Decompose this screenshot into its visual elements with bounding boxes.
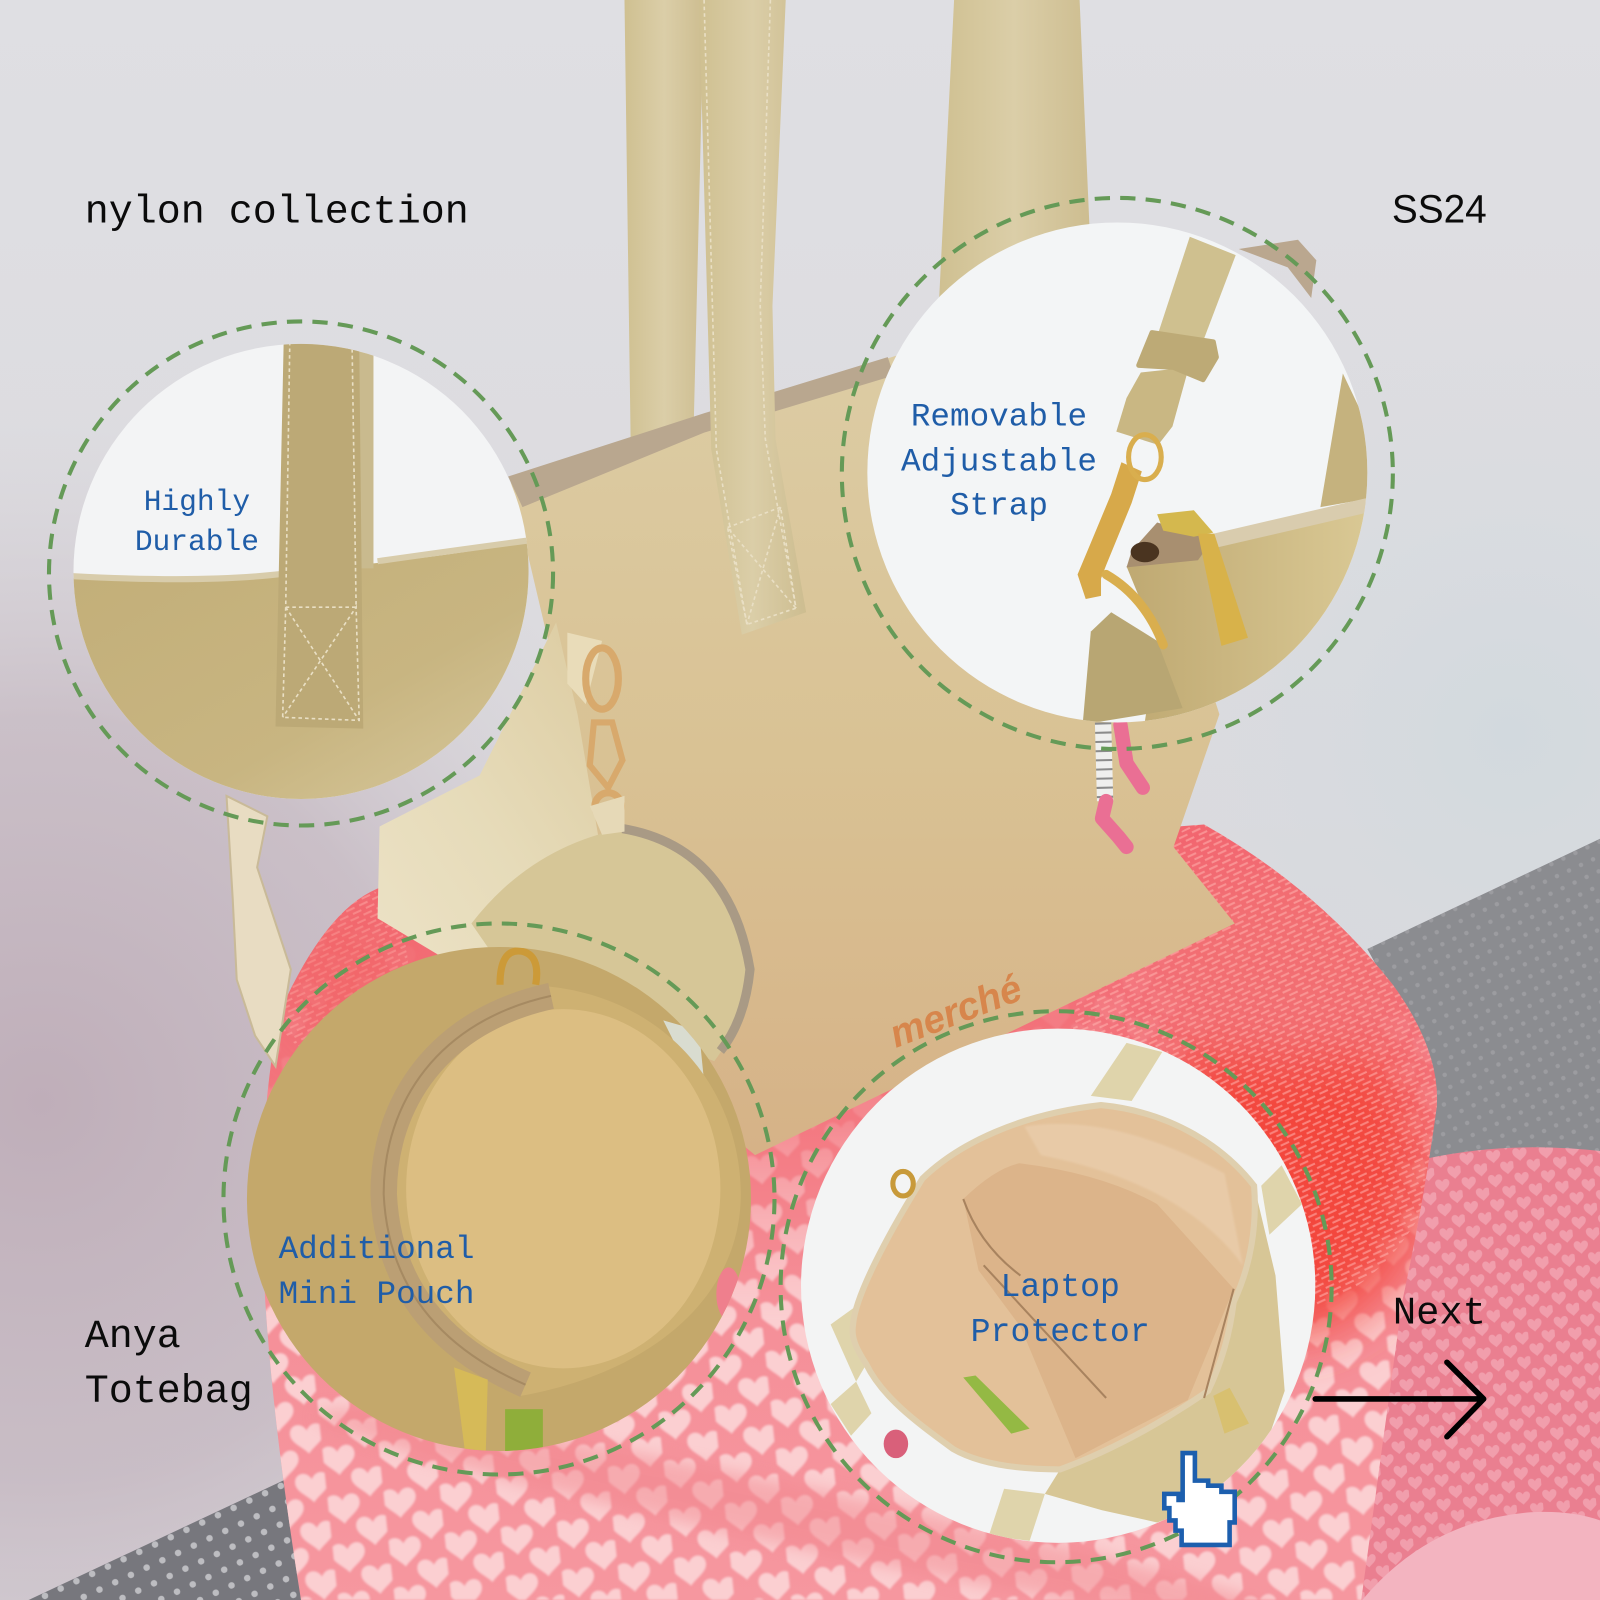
dashed ring [842,198,1393,749]
adjustable strap [1159,236,1236,338]
grey mesh floor: right [1367,839,1600,1194]
zoom circle: mini pouch [223,923,774,1474]
bag body [510,355,1235,1155]
heading: nylon collection: nylon collection [85,190,469,235]
label: highly durable: Durable [135,525,259,559]
label: additional mini pouch: Additional [279,1231,474,1268]
tan pouch [1127,500,1372,735]
tan tab [1083,612,1183,724]
next label: Next [1393,1291,1486,1335]
dashed ring [781,1011,1332,1562]
back left handle [624,0,704,439]
dashed ring [223,923,774,1474]
zipper band [508,357,894,507]
bubble wrap sheet: right [1327,1147,1600,1600]
pouch zipper [384,996,551,1385]
label: laptop protector: Laptop [1001,1268,1120,1306]
left gusset [378,622,612,980]
pink pull peeking [884,1430,908,1458]
green tag [505,1409,543,1455]
icon: pixel hand cursor [1164,1453,1235,1545]
product name: Totebag [85,1370,253,1415]
lining [853,1105,1255,1469]
label: highly durable: Highly [144,485,250,519]
strap tail [227,796,291,1066]
laptop pocket [963,1163,1234,1458]
label: laptop protector: Protector [971,1313,1150,1351]
tote bag: main photo [227,0,1316,1155]
label: removable adjustable strap: Removable [911,399,1087,436]
green label [963,1376,1030,1434]
front handle [699,0,806,635]
gold hardware [893,1171,913,1196]
zipper end and tag [1126,522,1202,568]
dashed ring [49,321,553,826]
heading: season: SS24 [1392,187,1487,231]
zoom circle: highly durable [49,321,553,826]
product name: Anya [85,1315,181,1360]
zoom circle: laptop protector [781,1011,1332,1562]
gold clasp [1078,462,1142,599]
right strap [1320,373,1372,507]
label: removable adjustable strap: Adjustable [901,443,1097,480]
bubble wrap cylinder [264,824,1438,1600]
pouch face [406,1009,720,1368]
zoom circle: removable strap [842,198,1393,749]
pouch rim [378,986,741,1396]
arrow [1315,1362,1484,1437]
gold ring [500,951,537,985]
mini pouch behind [471,829,750,1061]
metal clip [567,633,622,819]
back strap [347,342,373,568]
tan bag fabric [74,542,529,799]
bag corner top right [1239,240,1316,298]
logo: merché [884,967,1028,1056]
pull cords [1103,722,1105,801]
label: removable adjustable strap: Strap [950,487,1048,524]
back right handle [939,0,1090,337]
label: additional mini pouch: Mini Pouch [279,1276,474,1313]
grey mesh floor: bottom left [29,1476,316,1600]
stitched strap [276,342,363,729]
handles [831,1043,1302,1541]
outer bag [1045,1186,1285,1522]
gold pull [454,1367,488,1454]
